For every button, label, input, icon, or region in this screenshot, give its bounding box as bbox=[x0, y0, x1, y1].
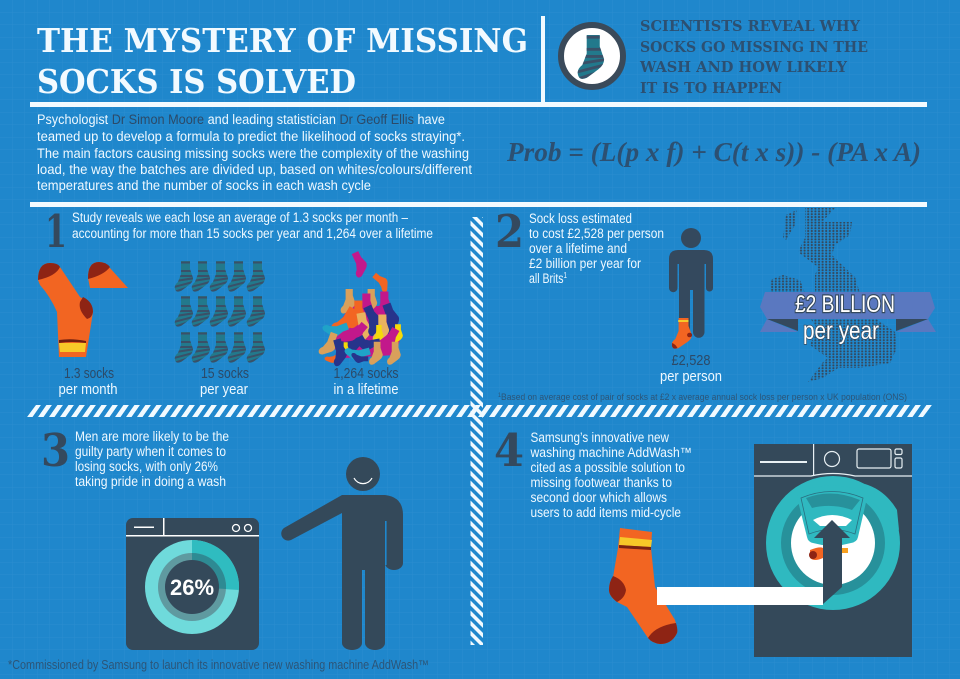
subheading bbox=[639, 18, 868, 97]
section 2 text: £2 billion per year for bbox=[529, 256, 641, 271]
section 3 text: losing socks, with only 26% bbox=[75, 459, 218, 474]
icon: sock in circle bbox=[561, 25, 623, 87]
label: 1,264 socks in a lifetime: in a lifetime bbox=[334, 381, 398, 398]
icon: washing machine with 26%: 26% bbox=[170, 575, 214, 600]
label: £2,528 per person: £2,528 bbox=[672, 352, 710, 369]
section 2 text: to cost £2,528 per person bbox=[529, 226, 664, 241]
icon: AddWash washing machine bbox=[754, 444, 912, 657]
section 4 text: washing machine AddWash™ bbox=[530, 445, 692, 460]
section 4 text: cited as a possible solution to bbox=[530, 460, 685, 475]
subheading: WASH AND HOW LIKELY bbox=[639, 59, 848, 76]
label: £2,528 per person: per person bbox=[660, 368, 722, 385]
icon: orange sock bbox=[609, 528, 677, 644]
intro text: Psychologist Dr Simon Moore and leading statistician Dr Geoff Ellis have bbox=[37, 112, 445, 127]
intro text: teamed up to develop a formula to predict the likelihood of socks straying*. bbox=[37, 129, 465, 144]
title bbox=[37, 21, 528, 101]
footnote: Based on average cost of pair of socks at £2 x average annual sock loss per person x UK population (ONS) bbox=[501, 392, 907, 403]
intro text: The main factors causing missing socks were the complexity of the washing bbox=[37, 146, 469, 161]
arrow: sock into machine bbox=[657, 520, 850, 605]
label: 1,264 socks in a lifetime bbox=[334, 365, 398, 398]
title: SOCKS IS SOLVED bbox=[37, 62, 356, 101]
section 4 text: users to add items mid-cycle bbox=[530, 505, 681, 520]
section 4 text: missing footwear thanks to bbox=[530, 475, 672, 490]
label: 1.3 socks per month: 1.3 socks bbox=[64, 365, 114, 382]
panel: section 2 bbox=[495, 205, 936, 403]
section 4 text: second door which allows bbox=[530, 490, 667, 505]
map: dotted UK bbox=[770, 208, 897, 382]
ribbon: £2 billion per year bbox=[760, 291, 936, 345]
label: 1,264 socks in a lifetime: 1,264 socks bbox=[334, 365, 398, 382]
subheading: SOCKS GO MISSING IN THE bbox=[640, 39, 868, 56]
section 3 text: guilty party when it comes to bbox=[75, 444, 226, 459]
number 3: 3 bbox=[41, 424, 70, 477]
icon: washing machine with 26% bbox=[126, 518, 259, 650]
panel: section 1 bbox=[38, 205, 433, 398]
section 2 text: Sock loss estimated bbox=[529, 211, 632, 226]
intro text: temperatures and the number of socks in each wash cycle bbox=[37, 178, 371, 193]
panel: section 3 bbox=[41, 424, 403, 650]
section 1 text: accounting for more than 15 socks per year and 1,264 over a lifetime bbox=[72, 226, 433, 241]
icon: large orange sock torn bbox=[38, 262, 128, 357]
section 4 text: Samsung’s innovative new bbox=[530, 430, 669, 445]
title: THE MYSTERY OF MISSING bbox=[37, 21, 528, 60]
section 1 text bbox=[72, 210, 433, 241]
label: £2,528 per person bbox=[660, 352, 722, 385]
section 3 text bbox=[75, 429, 229, 489]
striped vertical divider bbox=[470, 217, 483, 645]
striped horizontal divider bbox=[27, 405, 932, 417]
intro text: load, the way the batches are divided up, based on whites/colours/different bbox=[37, 162, 472, 177]
number 4: 4 bbox=[494, 424, 524, 477]
section 3 text: taking pride in doing a wash bbox=[75, 474, 226, 489]
label: 15 socks per year: per year bbox=[200, 381, 248, 398]
intro text bbox=[37, 112, 472, 193]
icon: person with orange sock bbox=[669, 228, 713, 349]
commissioning footnote: *Commissioned by Samsung to launch its innovative new washing machine AddWash™ bbox=[8, 658, 429, 672]
section 3 text: Men are more likely to be the bbox=[75, 429, 229, 444]
subheading: SCIENTISTS REVEAL WHY bbox=[640, 18, 861, 35]
formula: Prob = (L(p x f) + C(t x s)) - (PA x A) bbox=[506, 137, 921, 167]
label: 15 socks per year: 15 socks bbox=[201, 365, 249, 382]
panel: section 4 bbox=[494, 424, 912, 657]
icon: pile of socks bbox=[318, 250, 403, 367]
number 1: 1 bbox=[45, 205, 67, 258]
section 2 text: all Brits bbox=[529, 271, 573, 286]
subheading: IT IS TO HAPPEN bbox=[640, 80, 782, 97]
icon: fifteen socks bbox=[174, 261, 267, 363]
icon: smiling man pointing bbox=[281, 457, 403, 650]
section 1 text: Study reveals we each lose an average of 1.3 socks per month – bbox=[72, 210, 408, 225]
ribbon: £2 billion per year: £2 BILLION bbox=[795, 291, 895, 318]
ribbon: £2 billion per year: per year bbox=[803, 317, 879, 345]
number 2: 2 bbox=[495, 205, 524, 258]
section 2 text: over a lifetime and bbox=[529, 241, 627, 256]
label: 15 socks per year bbox=[200, 365, 249, 398]
label: 1.3 socks per month bbox=[58, 365, 118, 398]
section 2 text: 1 bbox=[564, 271, 567, 280]
section 4 text bbox=[530, 430, 692, 520]
section 2 text bbox=[529, 211, 664, 286]
footnote: 1 bbox=[498, 393, 502, 399]
label: 1.3 socks per month: per month bbox=[58, 381, 118, 398]
